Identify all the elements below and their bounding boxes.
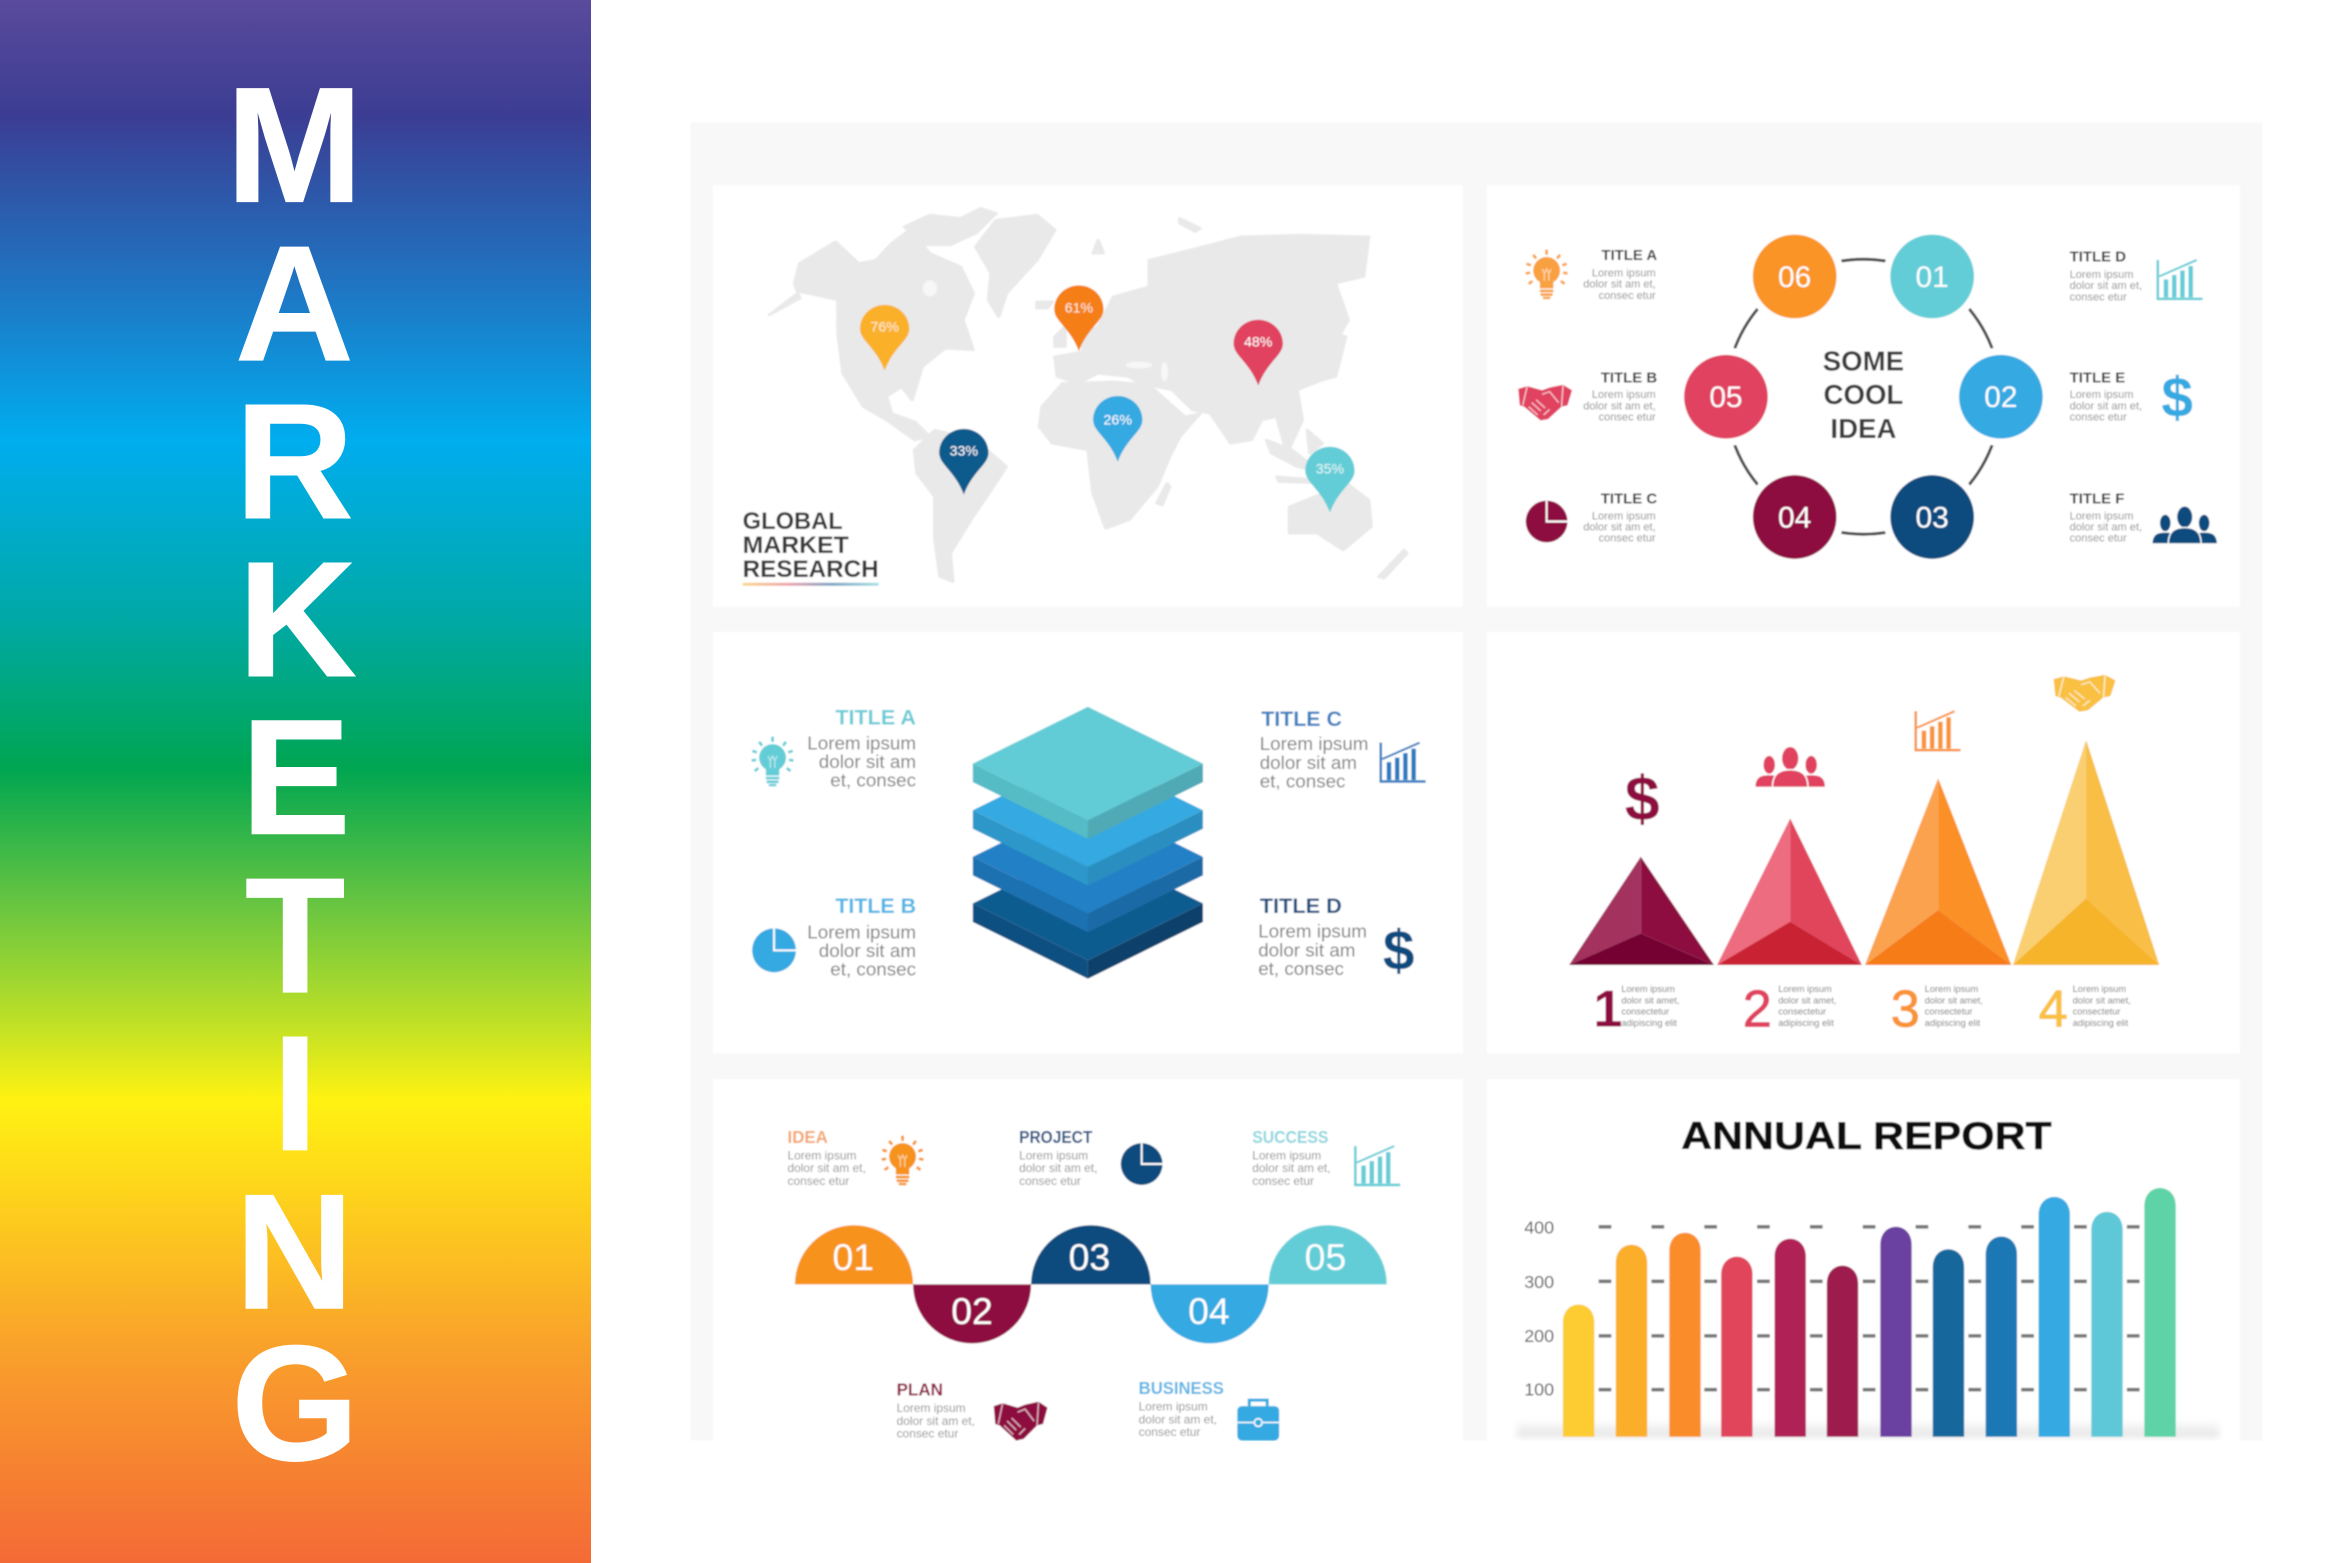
text: plan <box>897 1380 975 1440</box>
map pin 26% <box>1093 396 1142 462</box>
step 3 label: adipiscing elit <box>1925 1018 1981 1028</box>
heading underline <box>743 583 879 586</box>
text: title C: consec etur <box>1599 533 1656 545</box>
icon: yellow handshake <box>2054 675 2116 712</box>
text: title F: Lorem ipsum <box>2070 510 2134 522</box>
text: title F: consec etur <box>2070 533 2127 545</box>
wave segment 04 <box>1151 1284 1269 1343</box>
y axis labels: 400 <box>1524 1218 1554 1238</box>
text: title C: TITLE C <box>1601 491 1657 508</box>
y axis labels: 300 <box>1524 1272 1554 1292</box>
step 01 <box>1883 227 1981 326</box>
map pin 48% <box>1234 320 1283 386</box>
text: success: SUCCESS <box>1252 1127 1328 1147</box>
heading: global market research: RESEARCH <box>743 556 879 583</box>
text: plan: consec etur <box>897 1426 958 1440</box>
map pin 76% <box>860 305 909 371</box>
text: title C <box>1260 706 1368 791</box>
text: title E <box>2070 370 2142 424</box>
text: title C <box>1583 491 1657 545</box>
text: project <box>1019 1127 1097 1188</box>
collage background <box>690 123 2262 1440</box>
step 1 label: Lorem ipsum <box>1621 984 1675 994</box>
wave segment 02: 02 <box>951 1290 993 1332</box>
step 01: 01 <box>1916 261 1949 294</box>
text: title D: et, consec <box>1258 958 1344 979</box>
text: project: PROJECT <box>1019 1127 1093 1147</box>
step 2 label: consectetur <box>1778 1007 1826 1017</box>
step 3 label: consectetur <box>1925 1007 1973 1017</box>
text: title B: dolor sit am et, <box>1583 400 1656 412</box>
map pin 61% <box>1054 285 1104 351</box>
icon: orange bulb <box>1526 250 1568 299</box>
text: title E: Lorem ipsum <box>2070 389 2134 401</box>
gridline dashes <box>1599 1227 2140 1390</box>
text: title A: dolor sit am et, <box>1583 279 1656 291</box>
wave segment 02 <box>913 1284 1031 1343</box>
layer 1 <box>973 707 1203 839</box>
text: idea: consec etur <box>788 1174 849 1188</box>
step 06: 06 <box>1778 261 1811 294</box>
wave segment 03: 03 <box>1069 1236 1110 1278</box>
text: idea: Lorem ipsum <box>788 1149 857 1163</box>
map pin 48%: 48% <box>1244 335 1273 351</box>
icon: maroon dollar: $ <box>1625 764 1660 834</box>
cycle ring <box>1726 259 2001 534</box>
text: title F: dolor sit am et, <box>2070 521 2142 533</box>
text: title B: consec etur <box>1599 412 1656 424</box>
step 2 label: adipiscing elit <box>1778 1018 1834 1028</box>
step 03: 03 <box>1916 501 1949 534</box>
pyramid 2 <box>1717 818 1862 965</box>
text: title B: Lorem ipsum <box>807 921 916 942</box>
text: success <box>1252 1127 1331 1188</box>
step 3 label: Lorem ipsum <box>1925 984 1978 994</box>
layer 2 <box>973 753 1203 886</box>
y axis labels: 200 <box>1524 1326 1554 1346</box>
text: title A: dolor sit am <box>819 751 916 772</box>
step 4 label: adipiscing elit <box>2073 1018 2129 1028</box>
icon: blue pie <box>752 928 796 972</box>
text: plan: dolor sit am et, <box>897 1414 975 1428</box>
text: title F: TITLE F <box>2070 491 2124 508</box>
text: business <box>1139 1378 1224 1439</box>
text: title B: et, consec <box>830 959 916 980</box>
pyramid 4 <box>2013 740 2159 965</box>
step 2 label: Lorem ipsum <box>1778 984 1832 994</box>
text: title D: dolor sit am <box>1258 939 1355 960</box>
step 05 <box>1677 347 1775 446</box>
layer 3 <box>973 800 1203 932</box>
wave segment 01 <box>795 1225 913 1284</box>
icon: teal chart <box>2158 260 2203 299</box>
step 2 label: dolor sit amet, <box>1778 995 1836 1005</box>
icon: teal bulb <box>752 737 793 786</box>
center label: COOL <box>1824 379 1903 410</box>
text: plan: PLAN <box>897 1380 943 1400</box>
step 3 label: 3 <box>1891 981 1920 1039</box>
text: business: BUSINESS <box>1139 1378 1224 1398</box>
text: success: Lorem ipsum <box>1252 1149 1321 1163</box>
panel: annual report bar chart <box>1487 1079 2240 1440</box>
wave segment 05: 05 <box>1305 1236 1346 1278</box>
card background <box>713 632 1463 1053</box>
text: title A: et, consec <box>830 770 916 791</box>
icon: navy dollar: $ <box>1383 920 1414 983</box>
text: title D: TITLE D <box>2070 248 2126 265</box>
center label: IDEA <box>1830 413 1896 444</box>
heading: global market research <box>743 508 879 583</box>
y axis labels: 100 <box>1524 1380 1554 1400</box>
text: title A: Lorem ipsum <box>1592 267 1656 279</box>
text: title D: Lorem ipsum <box>2070 269 2134 281</box>
heading: annual report: ANNUAL REPORT <box>1681 1115 2052 1158</box>
panel: wave timeline <box>713 1079 1463 1440</box>
wave segment 04: 04 <box>1188 1290 1230 1332</box>
icon: red people <box>1755 746 1826 787</box>
text: plan: Lorem ipsum <box>897 1401 966 1415</box>
text: title D <box>1258 893 1367 979</box>
text: title D: Lorem ipsum <box>1258 921 1367 942</box>
world map <box>769 208 1407 582</box>
icon: blue chart <box>1381 743 1426 782</box>
text: title A: Lorem ipsum <box>807 732 916 753</box>
text: title E: dolor sit am et, <box>2070 400 2142 412</box>
step 05: 05 <box>1709 381 1743 414</box>
map pin 33%: 33% <box>950 444 978 460</box>
text: title A <box>1583 247 1657 302</box>
step 2 label: 2 <box>1743 981 1772 1039</box>
panel: infographics collage <box>690 123 2262 1440</box>
wave segment 03 <box>1031 1225 1151 1284</box>
icon: teal chart <box>1355 1146 1400 1185</box>
icon: blue briefcase <box>1237 1400 1279 1440</box>
card background <box>713 185 1463 607</box>
text: business: Lorem ipsum <box>1139 1400 1208 1414</box>
text: title C: Lorem ipsum <box>1260 733 1368 754</box>
step 4 label: consectetur <box>2073 1007 2120 1017</box>
text: title B: TITLE B <box>835 893 916 918</box>
bottom crop band <box>658 1441 2344 1563</box>
icon: maroon pie <box>1526 501 1568 542</box>
panel: global market research map <box>713 185 1463 607</box>
text: title E: TITLE E <box>2070 370 2125 387</box>
step 1 label <box>1593 981 1679 1039</box>
map pin 76%: 76% <box>870 320 899 336</box>
text: idea <box>788 1127 866 1188</box>
step 4 label: Lorem ipsum <box>2073 984 2126 994</box>
y axis labels <box>1524 1218 1554 1400</box>
heading: global market research: MARKET <box>743 532 849 559</box>
step 06 <box>1745 227 1844 326</box>
step 04 <box>1745 468 1844 566</box>
step 4 label: 4 <box>2039 981 2068 1039</box>
card background <box>713 1079 1463 1440</box>
text: title C: et, consec <box>1260 770 1345 791</box>
center label: SOME <box>1823 346 1904 377</box>
step 3 label: dolor sit amet, <box>1925 995 1983 1005</box>
step 04: 04 <box>1778 501 1811 534</box>
heading: global market research: GLOBAL <box>743 508 843 535</box>
step 1 label: consectetur <box>1621 1007 1669 1017</box>
map pin 61%: 61% <box>1065 300 1093 316</box>
text: title D: dolor sit am et, <box>2070 280 2142 292</box>
text: title C: Lorem ipsum <box>1592 510 1656 522</box>
step 1 label: adipiscing elit <box>1621 1018 1677 1028</box>
step 4 label <box>2039 981 2131 1039</box>
step 4 label: dolor sit amet, <box>2073 995 2131 1005</box>
text: idea: dolor sit am et, <box>788 1161 866 1175</box>
panel: layered stack <box>713 632 1463 1053</box>
text: title F <box>2070 491 2142 545</box>
text: title B: dolor sit am <box>819 940 916 961</box>
panel: rainbow sidebar <box>0 0 591 1563</box>
text: title B: TITLE B <box>1601 370 1657 387</box>
text: idea: IDEA <box>788 1127 828 1147</box>
icon: maroon handshake <box>994 1402 1048 1440</box>
icon: orange chart <box>1916 711 1961 750</box>
icon: blue dollar: $ <box>2161 367 2193 430</box>
step 1 label: 1 <box>1593 981 1622 1039</box>
pyramid 3 <box>1865 778 2011 965</box>
text: title D <box>2070 248 2142 303</box>
icon: navy people <box>2152 506 2218 544</box>
text: title D: TITLE D <box>1260 893 1342 918</box>
step 03 <box>1883 468 1981 566</box>
step 02 <box>1952 347 2050 446</box>
icon: orange bulb <box>882 1136 923 1185</box>
pyramid 1 <box>1569 857 1714 965</box>
icon: navy pie <box>1121 1143 1163 1185</box>
map pin 33% <box>939 429 988 495</box>
wave segment 05 <box>1269 1225 1387 1284</box>
text: business: consec etur <box>1139 1425 1200 1439</box>
text: title E: consec etur <box>2070 412 2127 424</box>
text: title A <box>807 705 916 791</box>
center label <box>1823 346 1904 444</box>
step 3 label <box>1891 981 1983 1039</box>
stacked layers <box>973 707 1203 979</box>
title: vertical MARKETING heading: MARKETING <box>226 53 363 1495</box>
layer 4 <box>973 847 1203 979</box>
bars <box>1563 1188 2176 1437</box>
text: title D: consec etur <box>2070 291 2127 303</box>
text: project: consec etur <box>1019 1174 1081 1188</box>
text: title C: dolor sit am <box>1260 752 1357 773</box>
text: project: dolor sit am et, <box>1019 1161 1097 1175</box>
text: project: Lorem ipsum <box>1019 1149 1088 1163</box>
text: title A: TITLE A <box>835 705 916 730</box>
text: title B <box>1583 370 1657 424</box>
text: title B <box>807 893 916 980</box>
map pin 26%: 26% <box>1104 412 1132 428</box>
card background <box>1487 185 2240 607</box>
baseline shadow <box>1517 1420 2219 1437</box>
text: title A: consec etur <box>1599 290 1656 302</box>
map pin 35%: 35% <box>1316 462 1345 478</box>
text: business: dolor sit am et, <box>1139 1412 1217 1426</box>
step 2 label <box>1743 981 1836 1039</box>
text: success: consec etur <box>1252 1174 1314 1188</box>
map pin 35% <box>1305 447 1355 513</box>
wave segment 01: 01 <box>832 1236 874 1278</box>
step 1 label: dolor sit amet, <box>1621 995 1679 1005</box>
text: title A: TITLE A <box>1601 247 1657 264</box>
text: title C: dolor sit am et, <box>1583 521 1656 533</box>
panel: some cool idea cycle <box>1487 185 2240 607</box>
text: success: dolor sit am et, <box>1252 1161 1331 1175</box>
text: title B: Lorem ipsum <box>1592 389 1656 401</box>
map details: inland seas <box>923 280 1168 381</box>
panel: pyramid chart <box>1487 632 2240 1053</box>
text: title C: TITLE C <box>1261 706 1342 731</box>
card background <box>1487 1079 2240 1440</box>
icon: red handshake <box>1518 385 1572 420</box>
step 02: 02 <box>1984 381 2018 414</box>
card background <box>1487 632 2240 1053</box>
